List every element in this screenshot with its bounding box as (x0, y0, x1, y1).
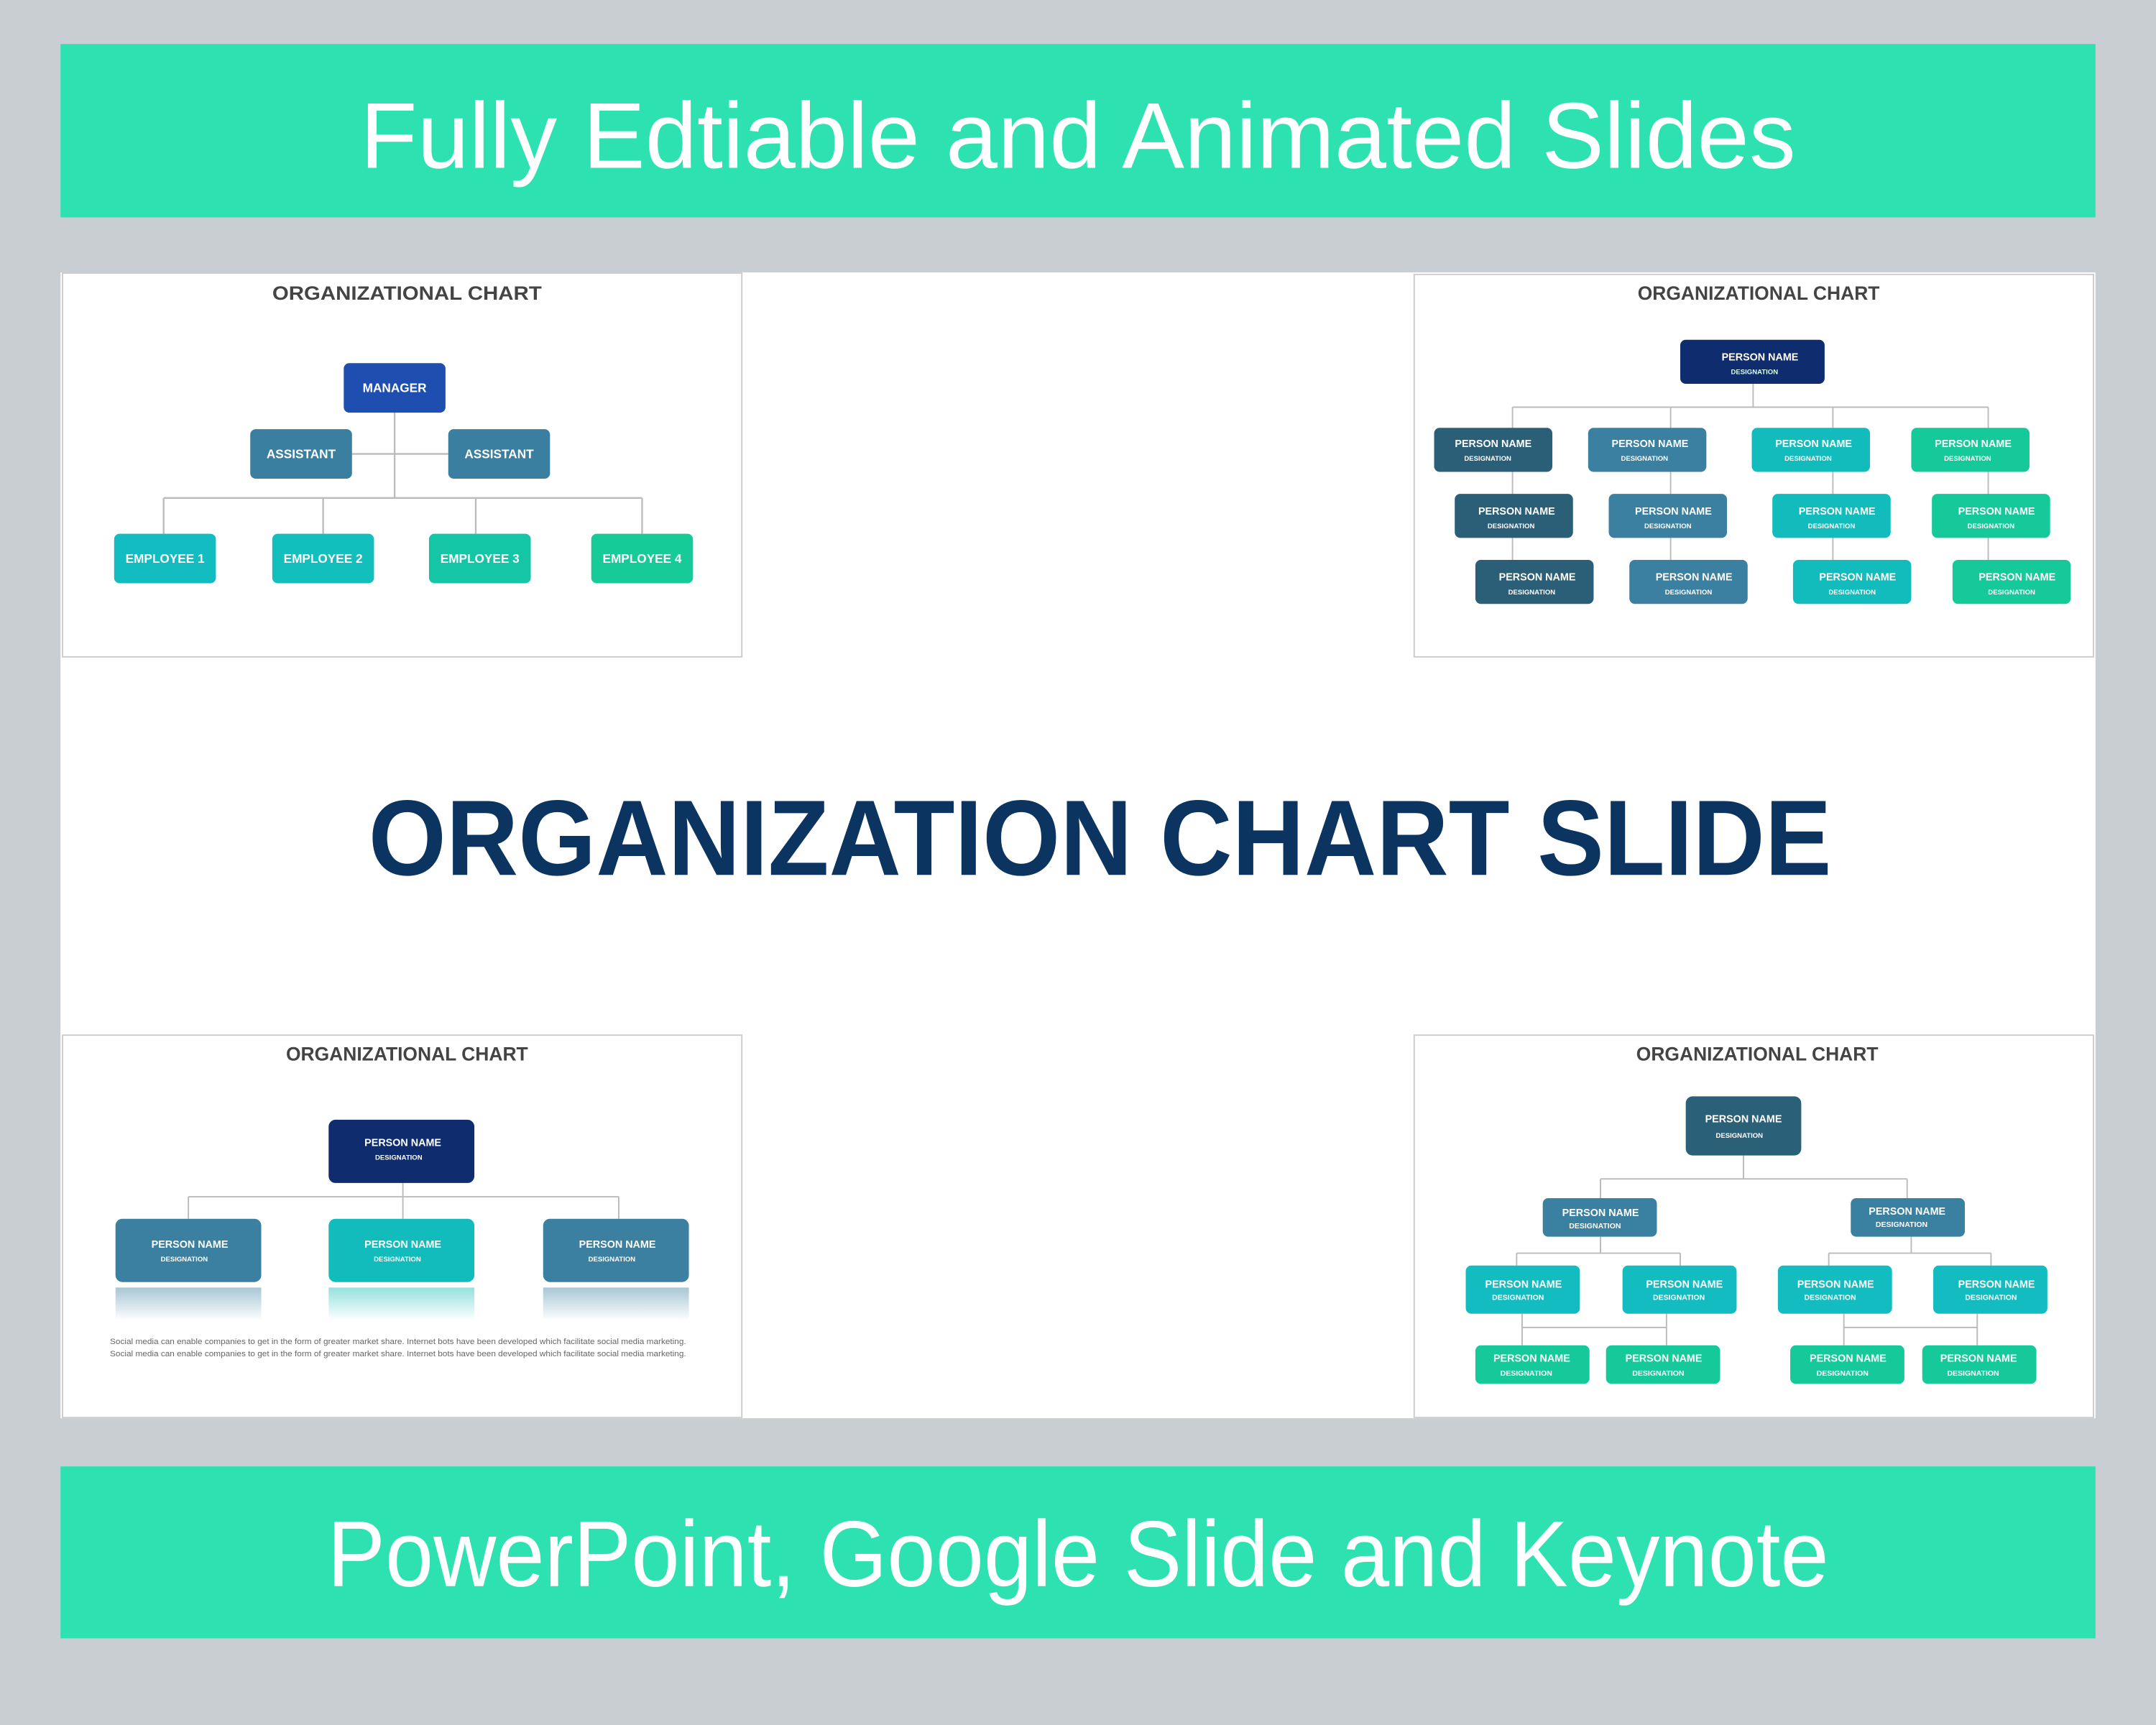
boxes: four columns: PERSON NAME (1478, 506, 1555, 518)
boxes: lower levels: PERSON NAME (1493, 1353, 1570, 1365)
main title: ORGANIZATION CHART SLIDE (369, 778, 1831, 898)
boxes: four columns: PERSON NAME (1612, 438, 1688, 450)
box: manager (344, 363, 446, 413)
boxes: lower levels: PERSON NAME (1485, 1279, 1562, 1290)
box: employees: EMPLOYEE 3 (441, 551, 520, 566)
boxes: lower levels: PERSON NAME (1958, 1279, 2035, 1290)
boxes: lower levels (1466, 1198, 2047, 1384)
panel: bottom-left org chart (63, 1035, 742, 1417)
panel: bottom-left org chart: ORGANIZATIONAL CHART (286, 1044, 528, 1065)
boxes: three persons with reflections (116, 1219, 689, 1320)
boxes: lower levels: PERSON NAME (1869, 1206, 1945, 1218)
boxes: four columns: PERSON NAME (1635, 506, 1712, 518)
boxes: lower levels: DESIGNATION (1632, 1369, 1685, 1378)
top banner (60, 44, 2096, 217)
boxes: lower levels: DESIGNATION (1492, 1294, 1544, 1302)
text block: description: Social media can enable companies to get in the form of greater market share. Internet bots have been developed which facilitate social media marketing. (110, 1338, 686, 1346)
boxes: four columns: PERSON NAME (1978, 572, 2055, 584)
boxes: lower levels: DESIGNATION (1947, 1369, 1999, 1378)
box: employees: EMPLOYEE 2 (284, 551, 363, 566)
boxes: four columns: DESIGNATION (1808, 523, 1855, 530)
panel: top-left org chart (63, 273, 742, 657)
boxes: lower levels: DESIGNATION (1965, 1294, 2017, 1302)
box: top person: PERSON NAME (1722, 351, 1798, 363)
boxes: three persons with reflections: PERSON NAME (364, 1239, 441, 1251)
boxes: three persons with reflections: DESIGNATION (161, 1256, 208, 1264)
boxes: lower levels: PERSON NAME (1940, 1353, 2017, 1365)
boxes: lower levels: DESIGNATION (1804, 1294, 1856, 1302)
panel: top-left org chart: ORGANIZATIONAL CHART (272, 282, 543, 304)
box: assistants (250, 429, 550, 479)
bottom banner: PowerPoint, Google Slide and Keynote (327, 1501, 1829, 1606)
boxes: lower levels: DESIGNATION (1817, 1369, 1869, 1378)
box: top person: DESIGNATION (1731, 369, 1778, 377)
boxes: four columns: PERSON NAME (1935, 438, 2012, 450)
boxes: four columns: DESIGNATION (1621, 455, 1668, 463)
box: assistants: ASSISTANT (464, 446, 534, 461)
box: manager: MANAGER (363, 380, 427, 395)
boxes: four columns: PERSON NAME (1499, 572, 1575, 584)
main white area (60, 272, 2096, 1418)
boxes: lower levels: PERSON NAME (1810, 1353, 1886, 1365)
text block: description (110, 1338, 686, 1358)
panel: bottom-right org chart: ORGANIZATIONAL CHART (1636, 1044, 1879, 1065)
boxes: four columns: DESIGNATION (1828, 589, 1876, 597)
boxes: four columns (1434, 428, 2070, 604)
box: employees (114, 534, 693, 583)
bottom banner (60, 1466, 2096, 1638)
boxes: lower levels: DESIGNATION (1501, 1369, 1552, 1378)
box: top person (1686, 1096, 1801, 1156)
boxes: four columns: PERSON NAME (1656, 572, 1733, 584)
top banner: Fully Edtiable and Animated Slides (360, 83, 1796, 188)
boxes: four columns: PERSON NAME (1455, 438, 1531, 450)
boxes: lower levels: PERSON NAME (1797, 1279, 1874, 1290)
panel: top-right org chart (1414, 275, 2093, 657)
boxes: four columns: DESIGNATION (1988, 589, 2035, 597)
box: top person: PERSON NAME (1705, 1114, 1782, 1126)
boxes: four columns: DESIGNATION (1508, 589, 1555, 597)
boxes: four columns: PERSON NAME (1819, 572, 1896, 584)
box: top person (1680, 340, 1825, 384)
box: top person: PERSON NAME (364, 1137, 441, 1149)
box: top person: DESIGNATION (375, 1154, 423, 1162)
boxes: three persons with reflections: PERSON NAME (152, 1239, 228, 1251)
boxes: lower levels: PERSON NAME (1646, 1279, 1723, 1290)
boxes: lower levels: DESIGNATION (1653, 1294, 1705, 1302)
boxes: four columns: DESIGNATION (1644, 523, 1692, 530)
boxes: four columns: DESIGNATION (1968, 523, 2014, 530)
boxes: four columns: PERSON NAME (1799, 506, 1876, 518)
boxes: four columns: DESIGNATION (1944, 455, 1991, 463)
boxes: three persons with reflections: DESIGNATION (589, 1256, 635, 1264)
boxes: lower levels: PERSON NAME (1562, 1208, 1639, 1219)
boxes: lower levels: PERSON NAME (1626, 1353, 1702, 1365)
boxes: three persons with reflections: DESIGNATION (374, 1256, 421, 1264)
box: top person: DESIGNATION (1715, 1132, 1763, 1140)
boxes: four columns: PERSON NAME (1775, 438, 1852, 450)
boxes: four columns: DESIGNATION (1464, 455, 1511, 463)
boxes: four columns: DESIGNATION (1665, 589, 1712, 597)
panel: bottom-right org chart (1414, 1035, 2093, 1417)
boxes: lower levels: DESIGNATION (1876, 1220, 1927, 1229)
box: employees: EMPLOYEE 4 (602, 551, 682, 566)
box: employees: EMPLOYEE 1 (126, 551, 205, 566)
text block: description: Social media can enable companies to get in the form of greater market share. Internet bots have been developed which facilitate social media marketing. (110, 1350, 686, 1358)
boxes: four columns: PERSON NAME (1958, 506, 2035, 518)
box: top person (328, 1120, 474, 1183)
box: assistants: ASSISTANT (267, 446, 336, 461)
boxes: four columns: DESIGNATION (1488, 523, 1535, 530)
panel: top-right org chart: ORGANIZATIONAL CHART (1638, 282, 1880, 304)
boxes: lower levels: DESIGNATION (1569, 1222, 1621, 1230)
boxes: four columns: DESIGNATION (1784, 455, 1832, 463)
boxes: three persons with reflections: PERSON NAME (579, 1239, 655, 1251)
